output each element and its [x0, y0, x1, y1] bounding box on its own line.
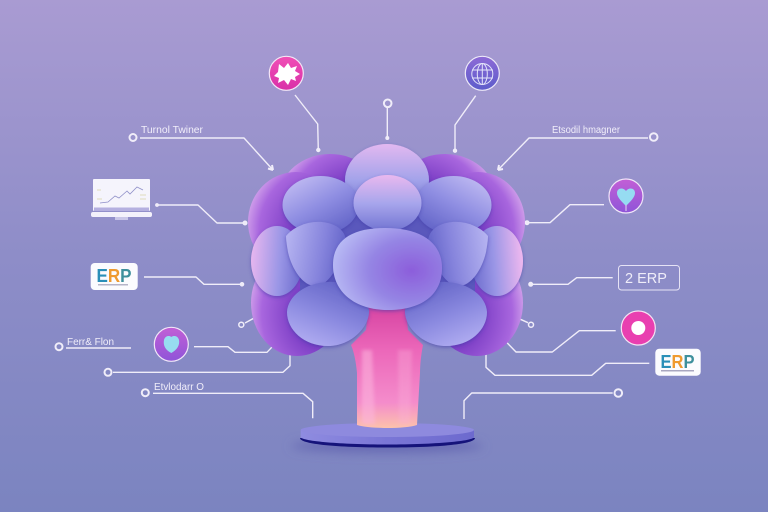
lobe: far right [471, 226, 523, 296]
line: left purple icon [194, 342, 277, 352]
icon: laptop with chart [91, 179, 152, 220]
line: small left node [239, 317, 256, 327]
lobe: upper center [354, 175, 422, 231]
icon: right ERP logo: ERP [660, 352, 694, 372]
line: globe icon [454, 96, 476, 152]
line: magenta icon [295, 95, 320, 152]
connector lines [56, 95, 658, 419]
line: bottom left label to base [142, 389, 313, 418]
line: bottom right node to base [464, 389, 622, 419]
icon: magenta splat [269, 56, 303, 90]
line: right ERP [486, 350, 649, 375]
lobe: lower left [287, 282, 369, 346]
icon: right ERP logo [655, 349, 701, 376]
line: pink icon [503, 331, 616, 352]
icon: heart [609, 179, 643, 213]
lobe: mid left [286, 222, 346, 286]
icon: globe [465, 56, 499, 90]
pedestal base [291, 423, 483, 453]
lobe: central [333, 228, 442, 310]
brain stem [351, 300, 423, 428]
line: left ERP [144, 277, 244, 286]
line: right outlined ERP [529, 278, 613, 286]
icon: left ERP logo [91, 263, 138, 290]
lobe: mid right [428, 222, 488, 286]
line: lower left node [104, 350, 290, 376]
label: left: Ferr& Flon [67, 337, 114, 348]
icon: pink target [621, 311, 655, 345]
brain [248, 144, 525, 428]
icon: outlined 2 ERP tag: 2 ERP [625, 271, 667, 287]
outer lobes [248, 154, 525, 356]
label: upper left: Turnol Twiner [141, 125, 204, 136]
lobe: far left [251, 226, 303, 296]
lobe: upper left [282, 176, 358, 234]
line: top center node [384, 100, 392, 139]
icon: left purple circle [154, 327, 188, 361]
lobe: top center [345, 144, 429, 216]
icon: left ERP logo: ERP [96, 266, 132, 286]
line: upper right label [498, 133, 658, 170]
lobe: upper right [416, 176, 492, 234]
line: heart icon [525, 205, 604, 224]
icon: outlined 2 ERP tag [618, 266, 680, 290]
line: left label with node [56, 343, 131, 350]
line: upper left label [130, 134, 273, 170]
line: small right node [516, 317, 534, 327]
line: laptop [156, 204, 247, 225]
label: upper right: Etsodil hmagner [552, 125, 621, 136]
lobe: lower right [405, 282, 487, 346]
label: bottom left: Etvlodarr O [154, 382, 204, 393]
